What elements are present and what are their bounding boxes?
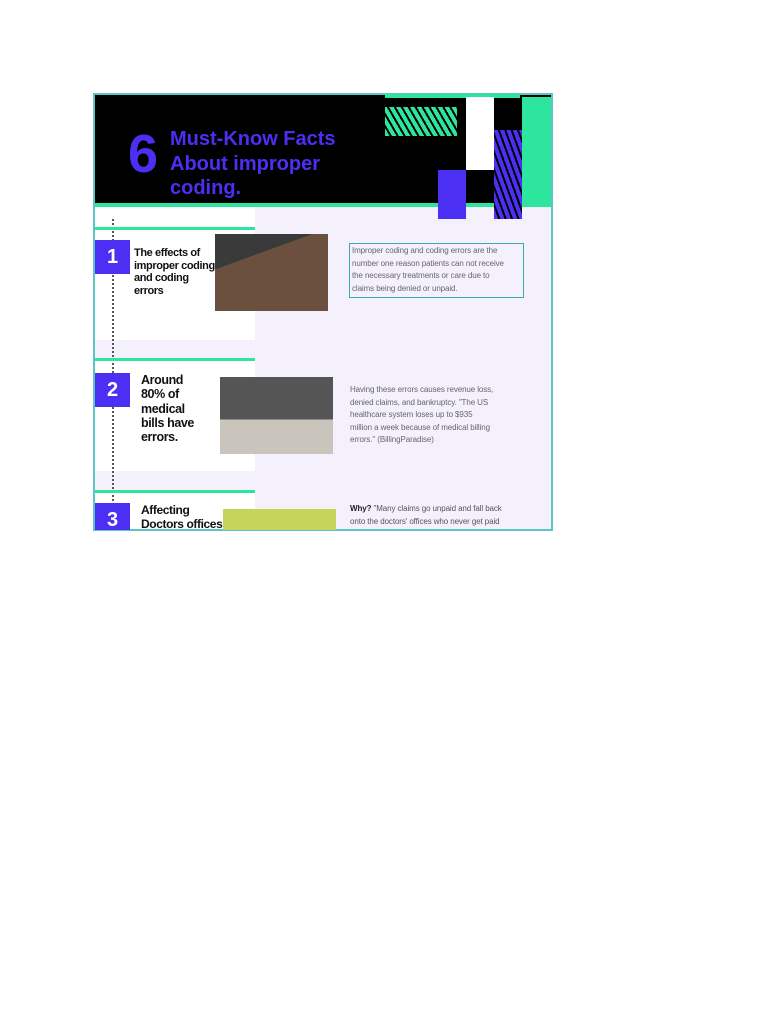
title (128, 124, 336, 199)
text 2 (350, 385, 493, 444)
text box 1 (349, 243, 524, 298)
heading 3 (141, 503, 222, 530)
title: coding. (170, 177, 241, 199)
text 2: errors." (BillingParadise) (350, 435, 434, 444)
number 1 (95, 240, 130, 274)
title: Must-Know Facts (170, 128, 336, 150)
number 1: 1 (107, 246, 118, 268)
heading 2: bills have (141, 416, 194, 430)
infographic frame (93, 93, 553, 531)
text 3 (350, 504, 502, 526)
photo desk (220, 377, 333, 454)
section 3 (95, 503, 502, 530)
white left column (95, 207, 255, 340)
text 2: Having these errors causes revenue loss, (350, 385, 493, 394)
text box 1: Improper coding and coding errors are the (352, 246, 497, 255)
heading 2 (141, 373, 194, 444)
pointer (101, 207, 125, 219)
text 3: onto the doctors' offices who never get paid (350, 517, 500, 526)
header: black banner (95, 95, 551, 203)
heading 1: The effects of (134, 247, 200, 259)
text box 1: number one reason patients can not receive (352, 259, 504, 268)
number 3 (95, 503, 130, 537)
heading 1: and coding (134, 272, 189, 284)
decorative shapes (385, 94, 551, 219)
text box 1: the necessary treatments or care due to (352, 271, 490, 280)
heading 2: 80% of (141, 387, 179, 401)
section 2 (95, 373, 493, 454)
text 3: Why? "Many claims go unpaid and fall back (350, 504, 502, 513)
heading 1: errors (134, 284, 163, 296)
photo green (223, 509, 336, 539)
heading 2: Around (141, 373, 183, 387)
title: About improper (170, 152, 320, 174)
title: 6 (128, 124, 158, 184)
photo laptop (215, 234, 328, 311)
header green stripe (95, 203, 551, 207)
heading 1: improper coding (134, 260, 215, 272)
heading 2: medical (141, 402, 185, 416)
dotted timeline (112, 219, 114, 529)
text box 1: claims being denied or unpaid. (352, 284, 458, 293)
number 2: 2 (107, 378, 118, 400)
heading 1 (134, 247, 215, 296)
heading 2: errors. (141, 430, 178, 444)
heading 3: Affecting (141, 503, 189, 517)
section 1 (95, 234, 524, 311)
number 3: 3 (107, 508, 118, 530)
text 2: denied claims, and bankruptcy. "The US (350, 398, 488, 407)
text 2: million a week because of medical billing (350, 423, 490, 432)
text 2: healthcare system loses up to $935 (350, 410, 472, 419)
number 2 (95, 373, 130, 407)
